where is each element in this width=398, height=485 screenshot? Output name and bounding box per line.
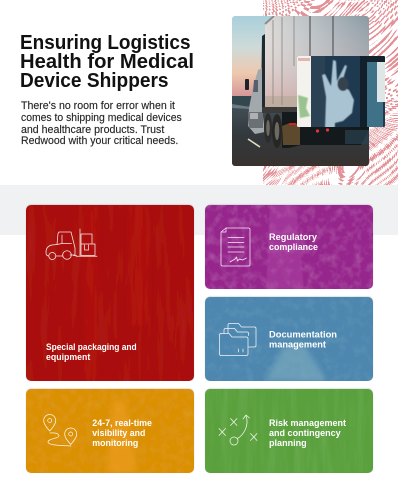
contour line pattern — [263, 0, 398, 185]
label: visibility and — [92, 428, 145, 438]
label: and contingency — [269, 428, 341, 438]
icon: route with map pins — [44, 414, 77, 446]
panel: regulatory compliance — [205, 205, 373, 289]
icon: play diagram — [219, 415, 257, 445]
panel: documentation management — [205, 297, 373, 381]
label: management — [269, 340, 326, 350]
label: compliance — [269, 242, 318, 252]
title: Health for Medical — [20, 51, 194, 73]
trailer — [265, 16, 369, 112]
x-ray image of hand — [297, 56, 385, 127]
title: Device Shippers — [20, 70, 168, 92]
gray background band — [0, 185, 398, 235]
title: Ensuring Logistics — [20, 32, 190, 54]
label: equipment — [46, 352, 90, 362]
label: Documentation — [269, 330, 337, 340]
wheels and chassis — [262, 107, 369, 148]
label: planning — [269, 438, 307, 448]
truck cab — [245, 34, 265, 134]
label: monitoring — [92, 438, 138, 448]
panel: real-time visibility — [26, 389, 194, 473]
icon: stacked folders — [220, 324, 256, 356]
photo: truck on highway at sunset — [232, 16, 369, 166]
intro text: Redwood with your critical needs. — [21, 135, 178, 147]
label: Regulatory — [269, 232, 317, 242]
label: 24-7, real-time — [92, 418, 152, 428]
intro text: There's no room for error when it — [21, 100, 175, 112]
icon: signed document — [221, 228, 250, 266]
intro text: comes to shipping medical devices — [21, 112, 182, 124]
icon: forklift with boxes — [46, 229, 97, 260]
panel: risk management — [205, 389, 373, 473]
label: Special packaging and — [46, 342, 137, 352]
label: Risk management — [269, 418, 346, 428]
intro text: and healthcare products. Trust — [21, 124, 164, 136]
panel: special packaging and equipment — [26, 205, 194, 381]
